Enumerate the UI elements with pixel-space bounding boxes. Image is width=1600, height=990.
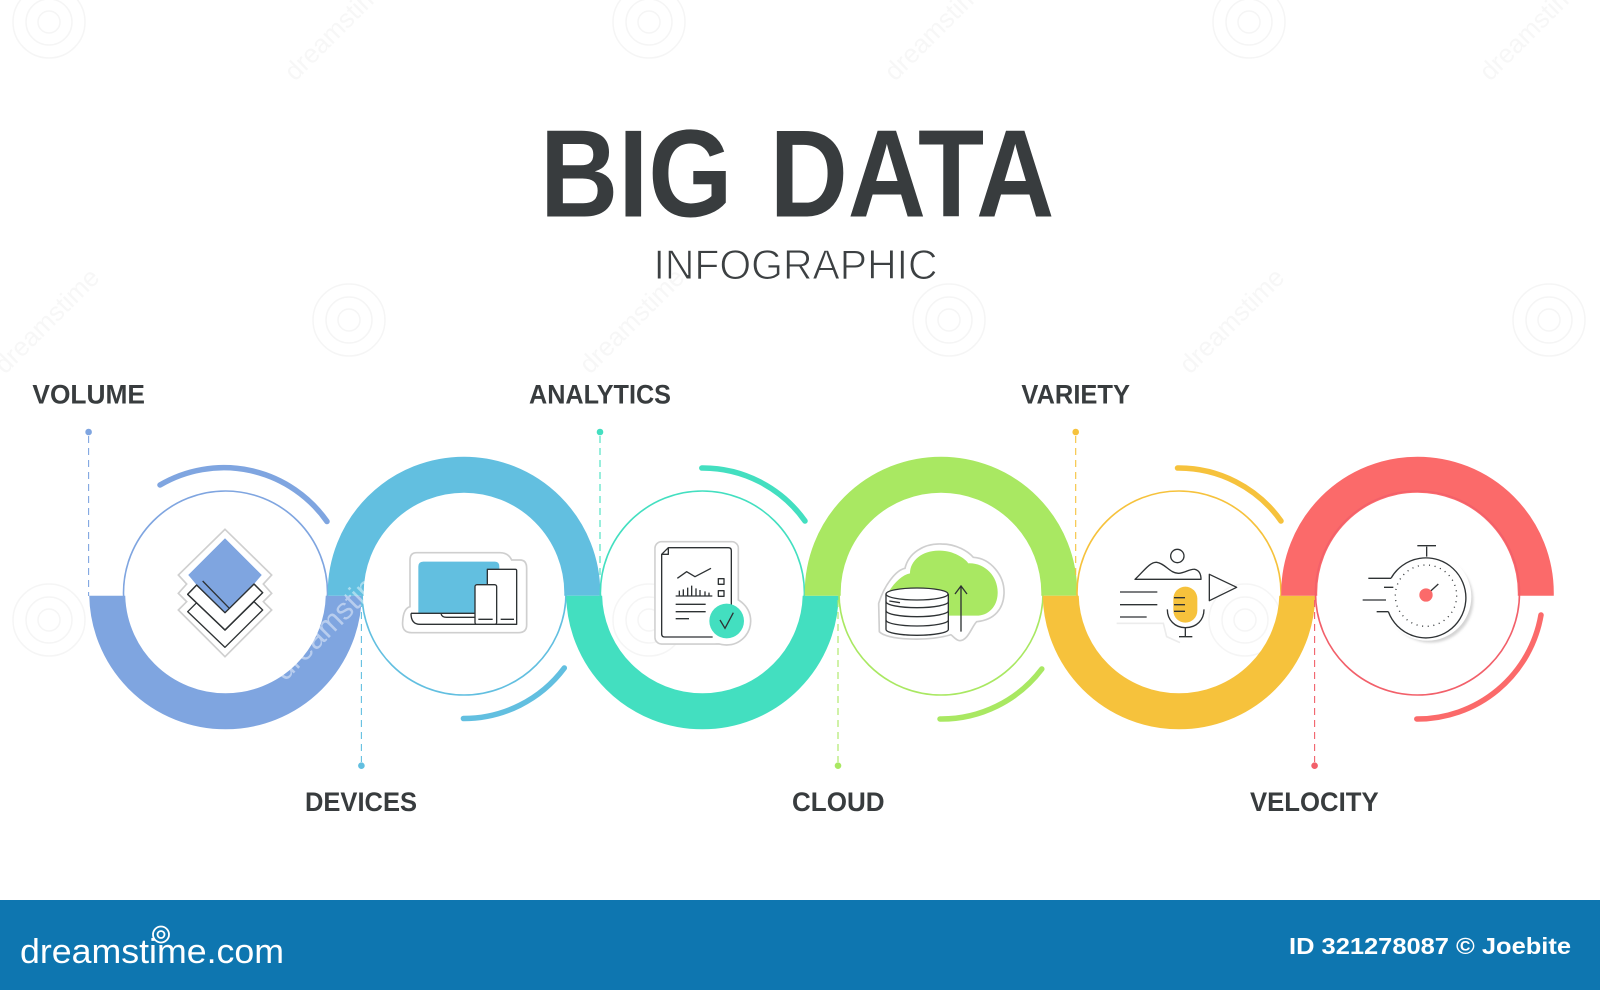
label: devices: DEVICES [305, 787, 417, 817]
thin circle: velocity [1316, 491, 1520, 695]
subtitle: INFOGRAPHIC [654, 241, 938, 288]
footer bar [0, 900, 1600, 990]
accent arc: velocity [1417, 615, 1541, 719]
step: cloud [792, 475, 1059, 817]
leader line: velocity [1311, 600, 1318, 769]
footer logo spiral [153, 926, 169, 942]
step: volume [32, 379, 344, 711]
watermark text [0, 0, 1590, 379]
label: analytics: ANALYTICS [529, 379, 671, 409]
step: variety [1021, 379, 1297, 711]
thin circle: variety [1077, 491, 1281, 695]
accent arc: variety [1178, 468, 1281, 521]
label: variety: VARIETY [1021, 379, 1130, 409]
half ring: volume [89, 596, 362, 730]
accent arc: volume [160, 468, 327, 522]
step: devices [305, 475, 582, 817]
leader line: devices [358, 600, 365, 769]
leader line: analytics [597, 429, 603, 578]
watermark text: dreamstime [1173, 262, 1290, 379]
thin circle: cloud [839, 491, 1043, 695]
label: volume: VOLUME [32, 379, 145, 409]
leader line: volume [85, 429, 92, 596]
half ring: cloud [804, 456, 1077, 596]
step: analytics [529, 379, 821, 711]
icon: report document [655, 542, 751, 645]
label: cloud: CLOUD [792, 787, 885, 817]
accent arc: analytics [702, 468, 805, 521]
half ring: variety [1042, 596, 1315, 730]
icon: stopwatch [1363, 546, 1473, 643]
footer credit: ID 321278087 © Joebite [1289, 933, 1571, 959]
half ring: velocity [1281, 456, 1554, 596]
accent arc: cloud [940, 669, 1042, 719]
icon: laptop and mobile devices [403, 553, 527, 633]
label: velocity: VELOCITY [1250, 787, 1379, 817]
icon: cloud database [879, 544, 1004, 641]
watermark text on ring: dreamstime.com [267, 507, 447, 687]
half ring: devices [328, 456, 600, 596]
icon: layers [178, 529, 272, 657]
footer logo text: dreamstime.com [20, 933, 284, 971]
watermark text: dreamstime [573, 262, 690, 379]
thin circle: volume [124, 491, 328, 695]
watermark spirals [13, 0, 1585, 656]
title: BIG DATA [540, 104, 1054, 243]
icon: media types [1117, 549, 1237, 643]
thin circle: devices [362, 491, 566, 695]
half ring: analytics [566, 596, 838, 730]
leader line: variety [1072, 429, 1079, 578]
thin circle: analytics [600, 491, 804, 695]
leader line: cloud [835, 600, 841, 769]
step: velocity [1250, 475, 1541, 817]
accent arc: devices [463, 668, 564, 719]
